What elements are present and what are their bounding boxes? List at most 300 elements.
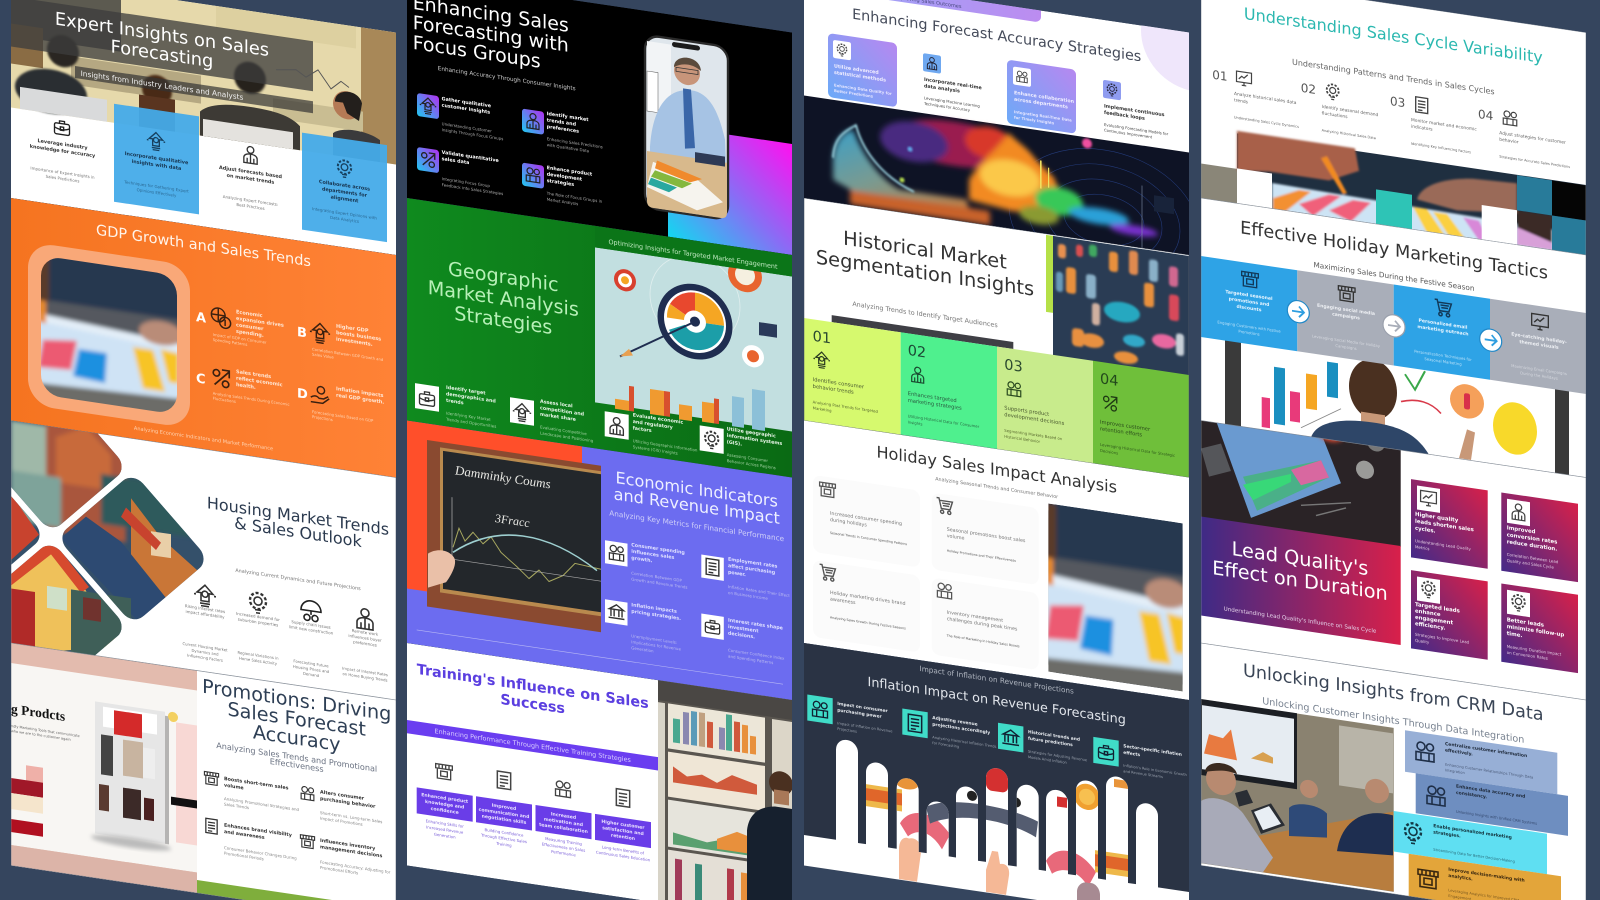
- item 1: impact affordability: [185, 609, 225, 620]
- card 2: [1501, 492, 1578, 582]
- subtitle: Analyzing Trends to Identify Target Audiences: [852, 300, 998, 329]
- panel: Economic Indicators and Revenue Impact: [407, 420, 792, 700]
- item 2: power.: [728, 570, 746, 578]
- item 3: sales data: [442, 156, 469, 166]
- item 2: affect purchasing: [728, 563, 776, 576]
- card 2: Improved: [1507, 525, 1536, 535]
- card 4: time.: [1507, 631, 1522, 639]
- item 2: Assess local: [540, 400, 573, 410]
- item 4: [700, 422, 782, 471]
- card 3: Enhance collaboration: [1014, 91, 1074, 105]
- card 3: Integrating Real-Time Data: [1014, 109, 1072, 123]
- segment 01: [804, 318, 901, 435]
- item 2: market share: [540, 412, 577, 423]
- card 1: during holidays: [830, 517, 867, 529]
- panel: Enhancing Sales Forecasting with Focus Groups: [407, 0, 792, 255]
- item 2: Improved: [492, 804, 516, 812]
- item 3: Housing Prices and: [293, 664, 330, 674]
- item 4: [595, 785, 651, 863]
- item 3: Models Amid Inflation: [1028, 755, 1067, 765]
- item D: Projections: [312, 414, 333, 422]
- item 1: Impact of Inflation on Revenue: [837, 721, 893, 733]
- card 3: Analyzing Expert Forecasts:: [223, 194, 278, 207]
- item 3: future predictions: [1028, 736, 1073, 748]
- item 1: Analyzing Promotional Strategies and: [224, 796, 299, 812]
- subtitle: Understanding Lead Quality's Influence on Sales Cycle: [1224, 606, 1377, 635]
- segment 03: development decisions: [1004, 412, 1065, 427]
- card 3: Quality: [1415, 638, 1430, 645]
- item 2: [510, 394, 594, 443]
- step 3: marketing outreach: [1417, 324, 1469, 338]
- item B: B: [297, 325, 307, 341]
- card 3: awareness: [830, 596, 856, 606]
- item 3: [536, 778, 592, 860]
- target illustration: [595, 226, 792, 436]
- panel: Geographic Market Analysis Strategies: [407, 198, 792, 477]
- item 3: Consumer Behavior Changes During: [224, 845, 297, 861]
- arrow 1: [1287, 299, 1309, 324]
- bar 1: [1405, 730, 1557, 794]
- column 4 of slides: [1201, 0, 1586, 900]
- item B: Sales Value: [312, 352, 334, 360]
- houses image in diamonds: [11, 420, 204, 656]
- card 3: [813, 560, 920, 653]
- panel: Housing Market Trends & Sales Outlook: [0, 404, 396, 702]
- item A: Impact of GDP on Consumer: [213, 332, 266, 345]
- item 3: [605, 598, 681, 658]
- item 1: [182, 582, 228, 664]
- product image: g Prodcts: [11, 701, 65, 724]
- item 1: Enhancing Skills for: [426, 818, 464, 829]
- item 3: Utilizing Geographic Information: [633, 438, 697, 453]
- item 4: Consumer Confidence Index: [728, 648, 784, 661]
- item 3: and regulatory: [633, 419, 674, 431]
- card 4: challenges during peak times: [947, 616, 1018, 633]
- title: Success: [500, 692, 565, 717]
- item B: boosts business: [336, 330, 381, 343]
- item 1: Trends and Opportunities: [445, 416, 496, 429]
- item 1: customer insights: [442, 103, 490, 116]
- item 3: Generation: [631, 645, 654, 654]
- item 4: [1093, 737, 1187, 783]
- title: & Sales Outlook: [234, 513, 362, 551]
- step 3: Personalization Techniques for: [1414, 349, 1472, 362]
- item 3: Promotional Periods: [224, 851, 264, 861]
- item 2: [301, 786, 382, 830]
- item 2: [476, 768, 532, 851]
- card 4: alignment: [331, 194, 359, 205]
- title: Promotions: Driving: [202, 675, 391, 726]
- card 1: Sales Predictions: [46, 174, 79, 184]
- title: Segmentation Insights: [816, 246, 1034, 301]
- card 1: statistical methods: [834, 70, 886, 84]
- product image: who we are to the customer again: [11, 729, 71, 742]
- item 2: Training: [495, 841, 512, 848]
- card 1: [30, 120, 95, 182]
- item 1: confidence: [431, 806, 459, 816]
- item 2: trends and: [547, 117, 577, 128]
- item 3: Systems (GIS) Insights: [633, 444, 678, 456]
- title: Inflation Impact on Revenue Forecasting: [868, 675, 1126, 728]
- column 3 of slides: [804, 0, 1247, 900]
- subtitle: Analyzing Sales Trends and Promotional: [216, 740, 377, 774]
- segment 03: Supports product: [1004, 405, 1049, 418]
- step 2: Leveraging Social Media for Holiday: [1312, 333, 1380, 348]
- item 4: retention: [611, 833, 635, 842]
- item C: reflect economic: [236, 376, 283, 388]
- step 4: themed visuals: [1519, 339, 1559, 351]
- item 4: Enhance product: [547, 166, 592, 178]
- bar 2: consistency.: [1456, 790, 1487, 800]
- item 1: [415, 380, 496, 429]
- panel: Expert Insights on Sales Forecasting: [11, 0, 396, 255]
- step 1: Engaging Customers with Festive: [1217, 319, 1281, 334]
- step 04: Strategies for Accurate Sales Predictions: [1499, 155, 1570, 169]
- item 4: effects: [1123, 750, 1140, 758]
- green accent: [1046, 235, 1053, 313]
- photo: tablet with chart: [1201, 402, 1401, 547]
- item 3: Historical trends and: [1028, 730, 1080, 743]
- card 1: Higher quality: [1415, 512, 1458, 524]
- card 3: enhance: [1415, 608, 1441, 618]
- title: Historical Market: [843, 227, 1007, 274]
- step 4: Maximizing Email Campaigns: [1511, 363, 1567, 376]
- card 1: cycles.: [1415, 526, 1436, 535]
- card 4: feedback loops: [1104, 110, 1145, 122]
- card 1: Enhancing Data Quality for: [834, 82, 892, 96]
- step 1: discounts: [1237, 304, 1262, 313]
- arrow 2: [1383, 313, 1405, 338]
- item 3: Inflation impacts: [631, 603, 677, 615]
- item 4: decisions.: [728, 631, 755, 641]
- title: Sales Forecast: [227, 698, 366, 741]
- segment 04: Decisions: [1100, 448, 1118, 455]
- item 4: and Revenue Streams: [1123, 769, 1163, 779]
- card 2: insights with data: [132, 159, 181, 172]
- gradient block: [668, 126, 792, 255]
- card 2: Techniques for Accuracy: [923, 101, 971, 113]
- item 2: competition and: [540, 405, 585, 418]
- item 2: [236, 590, 280, 667]
- title: Accuracy: [253, 720, 341, 756]
- title: Training's Influence on Sales: [417, 662, 649, 712]
- card 2: reduce duration.: [1507, 539, 1557, 553]
- card 3: [219, 146, 282, 210]
- bar 2: Enhance data accuracy and: [1456, 785, 1525, 800]
- item 2: communication and: [479, 807, 529, 820]
- step 01: Analyze historical sales data: [1234, 92, 1297, 106]
- item 4: influences buyer: [348, 633, 382, 643]
- panel: Training's Influence on Sales Success: [407, 643, 793, 900]
- card 1: Better Predictions: [834, 88, 874, 99]
- item 2: purchasing behavior: [320, 796, 376, 810]
- item 1: Insights Through Focus Groups: [442, 127, 503, 141]
- step 4: Eye-catching holiday-: [1511, 332, 1567, 346]
- card 4: Implement continuous: [1104, 104, 1165, 118]
- panel: GDP Growth and Sales Trends: [11, 198, 396, 477]
- item 4: Assessing Consumer: [727, 452, 768, 463]
- photo mosaic: pencil and chart: [1201, 126, 1586, 257]
- item 4: on Home Buying Trends: [342, 671, 388, 683]
- item 4: [300, 834, 390, 874]
- step 4: [1490, 299, 1586, 394]
- subtitle: Maximizing Sales During the Festive Season: [1314, 260, 1475, 293]
- item 2: Through Effective Sales: [480, 832, 527, 844]
- item 2: Increased demand for: [236, 611, 280, 622]
- dark bar: [832, 315, 1013, 349]
- item A: spending.: [236, 329, 264, 339]
- item 2: Inflation Rates and Their Effect: [728, 584, 790, 598]
- item D: real GDP growth.: [336, 393, 384, 406]
- item 1: Boosts short-term sales: [224, 777, 288, 792]
- card 1: Importance of Expert Insights in: [30, 165, 95, 180]
- title: Lead Quality's: [1232, 537, 1368, 580]
- item D: [298, 386, 384, 422]
- item B: [298, 322, 383, 361]
- item 4: management decisions: [320, 844, 382, 859]
- bar 4: Improve decision-making with: [1448, 868, 1525, 884]
- step 01: [1212, 67, 1299, 129]
- item D: D: [297, 386, 308, 403]
- subtitle: Optimizing Insights for Targeted Market Engagement: [609, 238, 778, 271]
- title: Holiday Sales Impact Analysis: [876, 442, 1117, 497]
- step 02: Analyzing Historical Sales Data: [1322, 128, 1376, 140]
- card 1: leads shorten sales: [1415, 519, 1474, 533]
- title block: [1201, 516, 1401, 645]
- item 2: suburban properties: [238, 617, 278, 628]
- item 3: Measuring Training: [545, 836, 582, 846]
- step 01: Understanding Sales Cycle Dynamics: [1234, 115, 1299, 129]
- item 1: trends: [446, 398, 464, 406]
- item 3: [417, 146, 503, 196]
- segment 02: Enhances targeted: [908, 391, 957, 404]
- segment 02: 02: [908, 342, 926, 362]
- item 3: Increased: [551, 812, 576, 821]
- item 1: Correlation Between GDP: [631, 571, 682, 583]
- card 4: Continuous Improvement: [1104, 127, 1153, 140]
- item 2: Adjusting revenue: [932, 716, 978, 728]
- step 03: indicators: [1411, 124, 1433, 133]
- item 2: negotiation skills: [482, 813, 527, 826]
- step 04: 04: [1478, 107, 1493, 123]
- card 2: Techniques for Gathering Expert: [124, 179, 189, 194]
- item 2: Evaluating Competitive: [540, 424, 587, 436]
- item C: Sales trends: [236, 369, 271, 380]
- card 2: Seasonal promotions boost sales: [947, 528, 1025, 544]
- card 4: [1501, 583, 1578, 673]
- image frame: [28, 242, 190, 428]
- title: GDP Growth and Sales Trends: [96, 222, 311, 270]
- card 4: [312, 160, 377, 223]
- card 3: Best Practices: [236, 202, 265, 211]
- item 1: growth.: [631, 555, 652, 564]
- step 1: Promotions: [1238, 329, 1260, 337]
- step 01: 01: [1212, 68, 1228, 84]
- title band: [11, 0, 313, 91]
- product image: [11, 643, 197, 894]
- item 4: development: [547, 171, 583, 183]
- step 04: [1478, 107, 1570, 169]
- decorative circle: [1141, 0, 1247, 99]
- card 2: data analysis: [924, 83, 960, 95]
- segment 03: Segmenting Markets Based on: [1004, 428, 1062, 441]
- item A: [196, 307, 284, 346]
- step 02: [1301, 80, 1379, 141]
- panel: Understanding Sales Cycle Variability: [1201, 0, 1586, 257]
- segment 03: [997, 347, 1093, 464]
- title: Market Analysis: [428, 276, 579, 321]
- card 1: [1411, 479, 1488, 569]
- item 3: Unemployment Levels:: [631, 633, 677, 645]
- step 2: Campaigns: [1335, 343, 1357, 351]
- step 03: 03: [1390, 94, 1405, 110]
- segment 01: Identifies consumer: [813, 377, 864, 391]
- card 1: [828, 33, 897, 107]
- item 4: [522, 161, 603, 210]
- item 2: [522, 107, 603, 155]
- item 1: Projections: [837, 727, 857, 734]
- bar 1: Enhancing Customer Relationships Through Data: [1445, 763, 1533, 780]
- item 3: limit new construction: [289, 624, 334, 636]
- step 2: Engaging social media: [1317, 304, 1375, 317]
- card 2: Opinions Effectively: [137, 187, 177, 198]
- step 02: Identify seasonal demand: [1322, 105, 1378, 118]
- item 2: with Qualitative Data: [547, 142, 590, 154]
- card 3: for Timely Insights: [1014, 115, 1055, 126]
- item A: expansion drives: [236, 316, 284, 329]
- item 4: Sector-specific inflation: [1123, 744, 1182, 758]
- item 4: Promotional Efforts: [320, 865, 358, 875]
- image: rainbow data landscape: [804, 96, 1199, 304]
- item 1: Current Housing Market: [182, 641, 228, 653]
- item 1: Sales Trends: [224, 802, 249, 810]
- subtitle: Insights from Industry Leaders and Analysts: [81, 69, 244, 102]
- card 3: [1411, 570, 1488, 660]
- column 1 of slides: [0, 0, 396, 900]
- segment 04: 04: [1100, 370, 1118, 390]
- item B: Correlation Between GDP Growth and: [312, 347, 383, 362]
- item 2: Analyzing Historical Inflation Trends: [932, 735, 996, 749]
- item 4: Interest rates shape: [728, 619, 783, 632]
- item 4: satisfaction and: [602, 825, 644, 837]
- item 1: Rising interest rates: [185, 603, 225, 614]
- segment 02: [901, 332, 997, 450]
- card 4: Evaluating Forecasting Models for: [1104, 122, 1168, 136]
- card 1: Utilize advanced: [834, 64, 879, 76]
- step 1: [1201, 256, 1297, 351]
- item 3: motivation and: [544, 816, 583, 828]
- item D: Forecasting Sales Based on GDP: [312, 409, 373, 423]
- card 2: [923, 53, 983, 114]
- item 1: Generation: [434, 831, 456, 840]
- top pill: [834, 0, 1041, 23]
- card 1: Leverage industry: [37, 138, 88, 151]
- item 4: Long-term Benefits of: [602, 844, 644, 856]
- step 04: behavior: [1499, 137, 1519, 146]
- panel: Inflation Impact on Revenue Forecasting: [804, 643, 1189, 900]
- item 3: Validate quantitative: [442, 151, 499, 164]
- subtitle: Analyzing Seasonal Trends and Consumer Behavior: [935, 476, 1058, 500]
- item 4: information systems: [727, 433, 782, 447]
- panel: Unlocking Insights from CRM Data: [1201, 643, 1586, 900]
- subtitle: Analyzing Key Metrics for Financial Performance: [609, 508, 785, 543]
- item 2: for Forecasting: [932, 741, 959, 749]
- item 2: projections accordingly: [932, 722, 990, 736]
- card 2: Leveraging Machine Learning: [924, 95, 980, 109]
- item 2: Regional Variations in: [237, 650, 279, 661]
- subtitle: Impact of Inflation on Revenue Projections: [920, 664, 1074, 696]
- item 3: [605, 408, 698, 459]
- step 03: Identifying Key Influencing Factors: [1411, 142, 1471, 154]
- title: Focus Groups: [413, 31, 541, 73]
- item C: Analyzing Sales Trends During Economic: [213, 391, 290, 407]
- column 2 of slides: [407, 0, 793, 900]
- bar 3: Streamlining Data for Better Decision-Making: [1433, 848, 1515, 864]
- item 1: influences sales: [631, 549, 675, 561]
- step 03: [1390, 93, 1477, 155]
- item 3: factors: [633, 425, 652, 434]
- subtitle: Unlocking Customer Insights Through Data Integration: [1262, 696, 1524, 746]
- title: Strategies: [454, 302, 552, 339]
- subtitle banner: [407, 720, 658, 770]
- panel: Effective Holiday Marketing Tactics: [1201, 198, 1586, 478]
- bar 1: Centralize customer information: [1445, 742, 1527, 759]
- item 3: [205, 818, 296, 860]
- item 4: The Role of Focus Groups in: [547, 191, 602, 204]
- card 3: Adjust forecasts based: [219, 165, 282, 180]
- step 03: Monitor market and economic: [1411, 118, 1477, 133]
- segment 04: Improves customer: [1100, 420, 1150, 433]
- card 4: Data Analytics: [330, 215, 359, 224]
- card 4: [1103, 80, 1169, 142]
- item 2: Home Sales Activity: [239, 655, 278, 666]
- card 2: Quality and Sales Cycle: [1507, 558, 1554, 570]
- item 4: (GIS).: [727, 439, 742, 448]
- segment 02: marketing strategies: [908, 398, 962, 412]
- card 3: efficiency.: [1415, 621, 1445, 632]
- segment 02: Utilizing Historical Data for Consumer: [908, 413, 979, 429]
- board line chart: [276, 69, 350, 90]
- blackboard photo: 3Fracc: [494, 511, 530, 530]
- title: Understanding Sales Cycle Variability: [1244, 4, 1543, 67]
- item 3: Integrating Focus Group: [442, 176, 490, 188]
- item B: Higher GDP: [336, 324, 368, 334]
- item 1: Identify target: [446, 386, 486, 397]
- item 2: Alters consumer: [320, 790, 364, 802]
- panel: Promotions: Driving Sales Forecast Accuracy: [11, 643, 396, 900]
- card 3: Strategies to Improve Lead: [1415, 632, 1469, 645]
- card 4: [932, 577, 1039, 670]
- bar 3: [1394, 811, 1547, 874]
- item 2: Employment rates: [728, 558, 777, 570]
- item B: investments.: [336, 337, 373, 348]
- step 04: Adjust strategies for customer: [1499, 131, 1566, 146]
- photo: man viewing dashboards: [658, 680, 793, 900]
- card 3: Analyzing Sales Growth During Festive Seasons: [830, 615, 906, 631]
- bar 4: analytics.: [1448, 873, 1473, 883]
- item C: C: [196, 371, 206, 388]
- segment 01: behavior trends: [813, 384, 854, 396]
- item 1: [807, 694, 893, 739]
- item 1: Consumer spending: [631, 543, 685, 556]
- bar 3: strategies.: [1433, 830, 1461, 840]
- title: Effective Holiday Marketing Tactics: [1240, 217, 1548, 284]
- item 3: Effectiveness on Sales: [542, 841, 585, 853]
- item 4: Utilize geographic: [727, 427, 776, 440]
- card 1: knowledge for accuracy: [30, 144, 96, 159]
- card 2: Incorporate qualitative: [125, 151, 188, 166]
- card 3: [1007, 60, 1076, 134]
